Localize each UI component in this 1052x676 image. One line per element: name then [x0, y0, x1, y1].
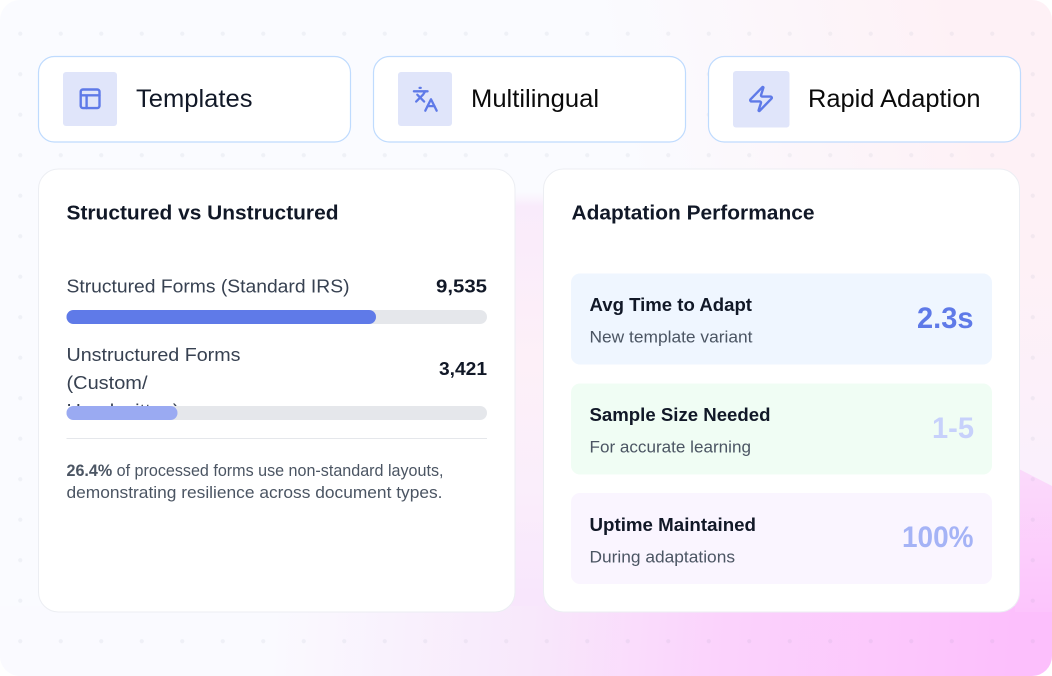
panel: Adaptation Performance — [544, 169, 1020, 612]
label: Templates: Templates — [136, 85, 252, 113]
row: structured forms: 9,535 — [436, 276, 487, 296]
row: unstructured forms: 3,421 — [439, 359, 487, 379]
note — [66, 462, 444, 502]
note: 26.4% of processed forms use non-standard layouts, — [66, 462, 444, 480]
metric: avg time to adapt: Avg Time to Adapt — [590, 295, 752, 315]
label: Multilingual: Multilingual — [471, 85, 599, 113]
card: Multilingual — [374, 56, 686, 142]
note: demonstrating resilience across document types. — [66, 484, 442, 502]
metric: avg time to adapt: 2.3s — [917, 302, 974, 335]
card: Rapid Adaption — [708, 56, 1020, 142]
label: Rapid Adaption: Rapid Adaption — [808, 85, 980, 113]
row: unstructured forms — [60, 345, 487, 422]
panel: Structured vs Unstructured — [38, 169, 515, 612]
metric: avg time to adapt — [571, 274, 992, 364]
metric: uptime maintained: During adaptations — [590, 548, 735, 566]
row: unstructured forms: Handwritten) — [66, 401, 180, 421]
row: structured forms: Structured Forms (Standard IRS) — [66, 276, 350, 296]
row: unstructured forms: Unstructured Forms — [66, 345, 240, 365]
heading: Structured vs Unstructured — [66, 202, 338, 224]
icon: template layout — [63, 72, 117, 126]
icon: lightning bolt — [733, 71, 790, 128]
heading: Adaptation Performance — [572, 202, 814, 224]
metric: sample size needed: For accurate learning — [590, 438, 751, 456]
metric: uptime maintained: Uptime Maintained — [590, 515, 756, 535]
metric: avg time to adapt: New template variant — [590, 328, 753, 346]
row: unstructured forms: (Custom/ — [66, 373, 149, 393]
metric: uptime maintained — [571, 493, 992, 584]
metric: sample size needed — [571, 384, 992, 474]
icon: translate — [398, 72, 452, 126]
metric: uptime maintained: 100% — [902, 521, 974, 554]
metric: sample size needed: 1-5 — [932, 412, 974, 445]
metric: sample size needed: Sample Size Needed — [590, 405, 770, 425]
card: Templates — [38, 56, 350, 142]
row: structured forms — [66, 276, 487, 324]
